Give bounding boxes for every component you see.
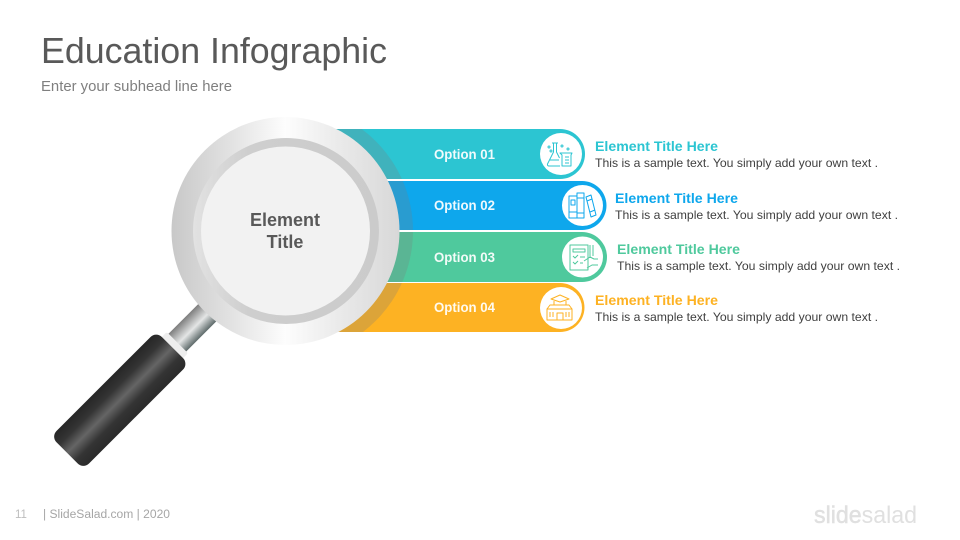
bar: option 02 <box>300 181 606 230</box>
magnifier handle <box>51 287 233 469</box>
label: option 04: Option 04 <box>434 299 495 315</box>
element text 3: This is a sample text. You simply add your own text . <box>617 259 900 273</box>
icon: lab flasks <box>540 133 582 175</box>
icon: school building <box>540 287 582 329</box>
icon: books <box>562 185 603 226</box>
element text 4: Element Title Here <box>595 292 718 308</box>
element text 1 <box>595 138 878 170</box>
lens rim <box>172 117 400 345</box>
element text 3 <box>617 241 900 273</box>
lens title: Title <box>267 232 303 252</box>
label: option 02: Option 02 <box>434 197 495 213</box>
element text 1: Element Title Here <box>595 138 718 154</box>
footer: 11 <box>15 509 27 521</box>
collar <box>160 332 188 360</box>
bar: option 04 <box>300 283 584 332</box>
element text 2: Element Title Here <box>615 190 738 206</box>
lens title: Element <box>250 210 320 230</box>
footer: | SlideSalad.com | 2020 <box>43 509 170 521</box>
element text 4 <box>595 292 878 324</box>
label: option 01: Option 01 <box>434 146 495 162</box>
black grip <box>51 331 189 469</box>
element text 2 <box>615 190 898 222</box>
element text 2: This is a sample text. You simply add your own text . <box>615 208 898 222</box>
element text 4: This is a sample text. You simply add your own text . <box>595 310 878 324</box>
metal shaft <box>165 295 225 355</box>
bar: option 03 <box>300 232 607 282</box>
logo wordmark: slidesalad <box>814 502 917 529</box>
title: Education Infographic <box>41 30 387 71</box>
option labels <box>434 146 495 315</box>
magnifying glass <box>51 117 400 469</box>
lens ring <box>193 138 379 324</box>
element text 1: This is a sample text. You simply add your own text . <box>595 156 878 170</box>
subtitle: Enter your subhead line here <box>41 78 232 95</box>
icon: checklist and hand <box>562 236 603 278</box>
bar: option 01 <box>300 129 585 179</box>
lens face <box>201 146 370 316</box>
element text 3: Element Title Here <box>617 241 740 257</box>
lens shadow on bars <box>336 129 413 332</box>
option bars <box>300 129 607 332</box>
label: option 03: Option 03 <box>434 249 495 265</box>
